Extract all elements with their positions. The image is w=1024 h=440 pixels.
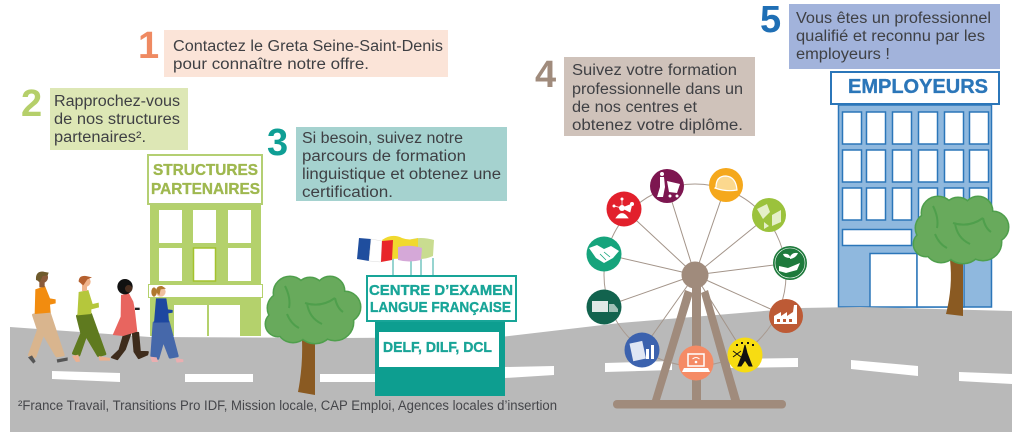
step 2: partenaires². (54, 129, 146, 146)
icon: Eiffel tower (728, 338, 762, 372)
step 4: Suivez votre formation (572, 62, 737, 79)
step 5: 5 (760, 0, 781, 41)
step 5: employeurs ! (796, 46, 890, 63)
tree left (266, 277, 360, 395)
step 1: 1 (138, 25, 159, 67)
person 4 (150, 286, 183, 363)
icon: globe (752, 198, 786, 232)
step 2: Rapprochez-vous (54, 93, 180, 110)
step 2: de nos structures (54, 111, 180, 128)
person 3 (112, 279, 148, 359)
exam centre building: DELF, DILF, DCL (383, 339, 492, 356)
icon: truck (586, 290, 622, 324)
step 3: linguistique et obtenez une (302, 166, 501, 183)
flags (357, 236, 434, 262)
person 2 (72, 276, 110, 362)
icon: network of people (606, 192, 642, 226)
step 4: 4 (535, 54, 556, 96)
step 3: 3 (267, 122, 288, 164)
icon: laptop wifi (678, 346, 714, 380)
step 4: obtenez votre diplôme. (572, 117, 743, 134)
step 4 (535, 54, 755, 136)
step 4: de nos centres et (572, 99, 698, 116)
green partner building: PARTENAIRES (151, 181, 260, 198)
walking people (28, 272, 183, 364)
step 1: pour connaître notre offre. (173, 56, 369, 73)
exam centre building: CENTRE D’EXAMEN (369, 282, 513, 299)
step 3: Si besoin, suivez notre (302, 130, 463, 147)
step 3: parcours de formation (302, 148, 466, 165)
step 2 (21, 83, 188, 150)
green partner building (148, 155, 262, 336)
step 3: certification. (302, 184, 393, 201)
exam centre building: LANGUE FRANÇAISE (370, 299, 511, 316)
step 5: qualifié et reconnu par les (796, 28, 985, 45)
footnote: ²France Travail, Transitions Pro IDF, Mission locale, CAP Emploi, Agences locales d’insertion (18, 398, 557, 413)
step 5 (760, 0, 1000, 69)
icon: helmet (709, 168, 743, 202)
step 1: Contactez le Greta Seine-Saint-Denis (173, 38, 443, 55)
tree right (914, 197, 1008, 316)
icon: hand with plant (773, 246, 807, 280)
icon: handshake (586, 236, 622, 272)
step 4: professionnelle dans un (572, 81, 743, 98)
ferris wheel (586, 168, 807, 408)
green partner building: STRUCTURES (153, 162, 258, 179)
icon: people with stroller (650, 169, 684, 203)
step 3 (267, 122, 507, 201)
person 1 (28, 272, 68, 364)
step 1 (138, 25, 448, 77)
road (10, 307, 1012, 432)
exam centre building (357, 236, 516, 396)
step 2: 2 (21, 83, 42, 125)
employers building (831, 72, 999, 307)
step 5: Vous êtes un professionnel (796, 10, 991, 27)
icon: factory (769, 299, 803, 333)
employers building: EMPLOYEURS (848, 76, 988, 98)
icon: calculator and chart (624, 332, 660, 368)
